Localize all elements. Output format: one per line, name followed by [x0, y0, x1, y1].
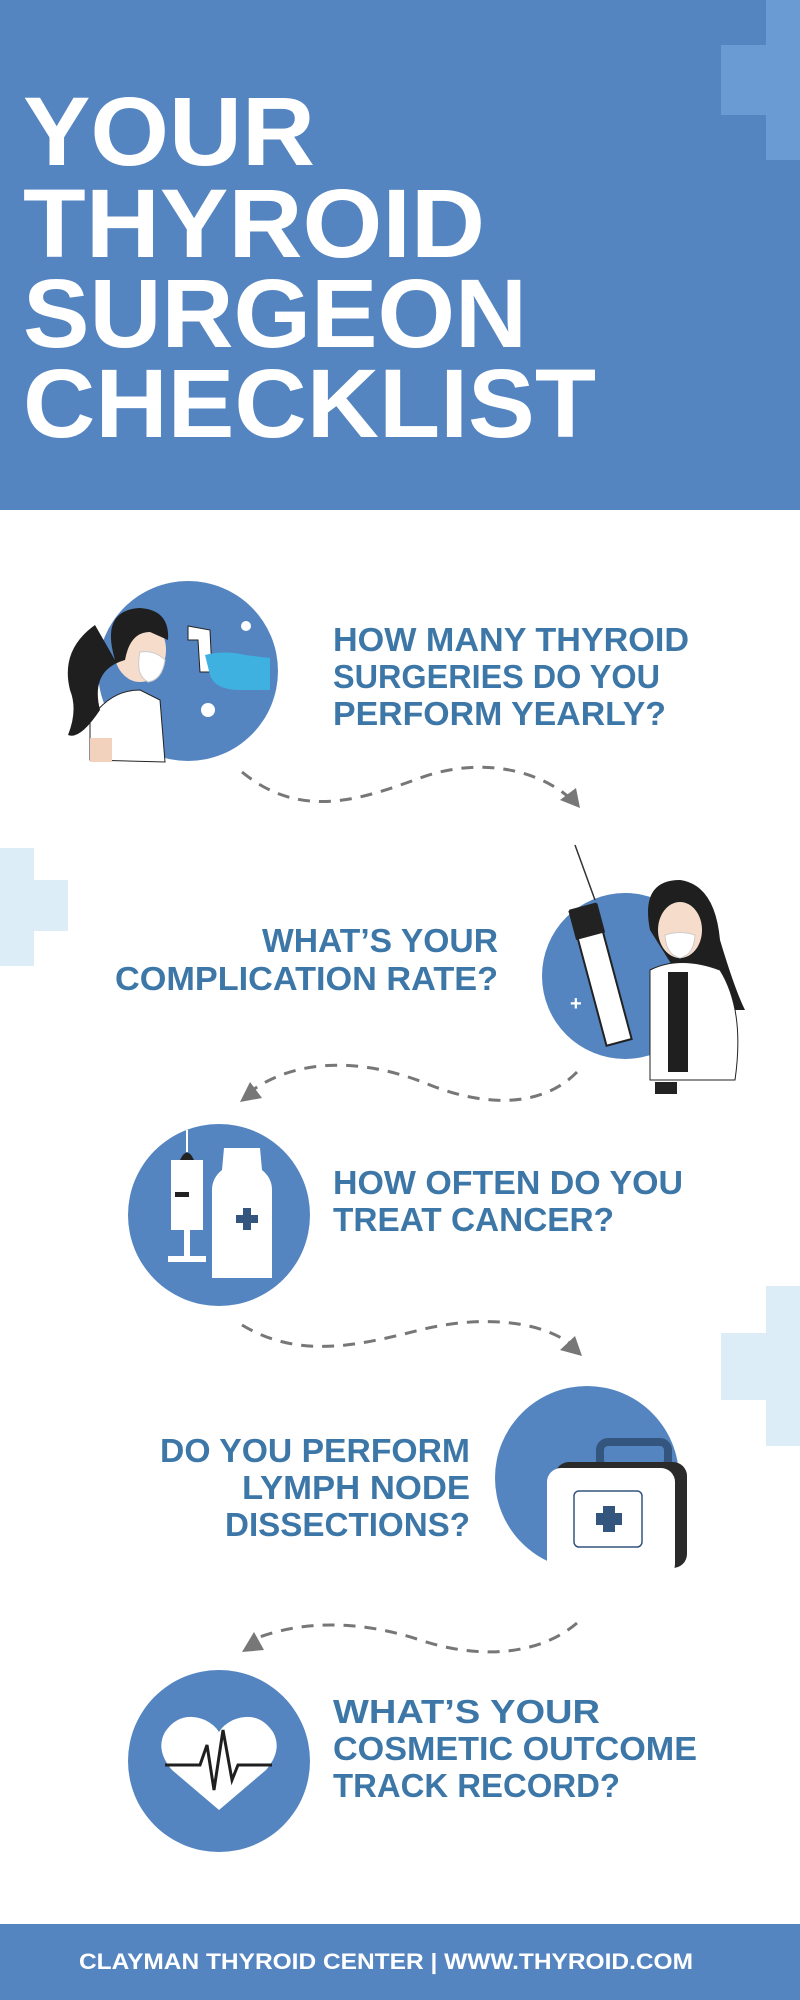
question 3: TREAT CANCER? — [333, 1201, 614, 1238]
question 4: LYMPH NODE — [242, 1469, 470, 1506]
title: SURGEON — [23, 259, 527, 368]
icon: header plus decoration — [721, 0, 800, 160]
question 5: TRACK RECORD? — [333, 1767, 620, 1804]
header banner — [0, 0, 800, 510]
question 4: DO YOU PERFORM — [160, 1432, 470, 1469]
question 3 — [333, 1164, 683, 1238]
item 2 illustration: doctor with syringe — [542, 845, 745, 1094]
question 1: HOW MANY THYROID — [333, 621, 689, 658]
footer: CLAYMAN THYROID CENTER | WWW.THYROID.COM — [79, 1949, 693, 1974]
title: YOUR — [23, 77, 315, 186]
icon: left plus decoration — [0, 848, 68, 966]
title — [23, 77, 596, 458]
arrow 2 — [240, 1065, 577, 1102]
item 1 illustration: doctor with thermometer — [68, 581, 278, 762]
icon: right plus decoration — [721, 1286, 800, 1446]
arrow 4 — [242, 1623, 577, 1652]
question 3: HOW OFTEN DO YOU — [333, 1164, 683, 1201]
question 4: DISSECTIONS? — [225, 1506, 470, 1543]
arrow 1 — [242, 767, 580, 808]
question 2 — [115, 922, 498, 997]
question 5: COSMETIC OUTCOME — [333, 1730, 697, 1767]
question 5: WHAT’S YOUR — [333, 1693, 600, 1730]
item 2 illustration: doctor with syringe: + — [570, 993, 582, 1015]
question 2: WHAT’S YOUR — [262, 922, 498, 959]
question 4 — [160, 1432, 470, 1543]
title: CHECKLIST — [23, 349, 596, 458]
item 5 illustration: heart with pulse — [128, 1670, 310, 1852]
arrow 3 — [242, 1322, 582, 1356]
footer — [0, 1924, 800, 2000]
title: THYROID — [23, 169, 485, 278]
item 4 illustration: medical kit — [495, 1386, 687, 1578]
question 2: COMPLICATION RATE? — [115, 960, 498, 997]
question 1: PERFORM YEARLY? — [333, 695, 666, 732]
item 3 illustration: syringe and bottle — [128, 1124, 310, 1306]
question 1: SURGERIES DO YOU — [333, 658, 660, 695]
question 1 — [333, 621, 689, 732]
question 5 — [333, 1693, 697, 1804]
